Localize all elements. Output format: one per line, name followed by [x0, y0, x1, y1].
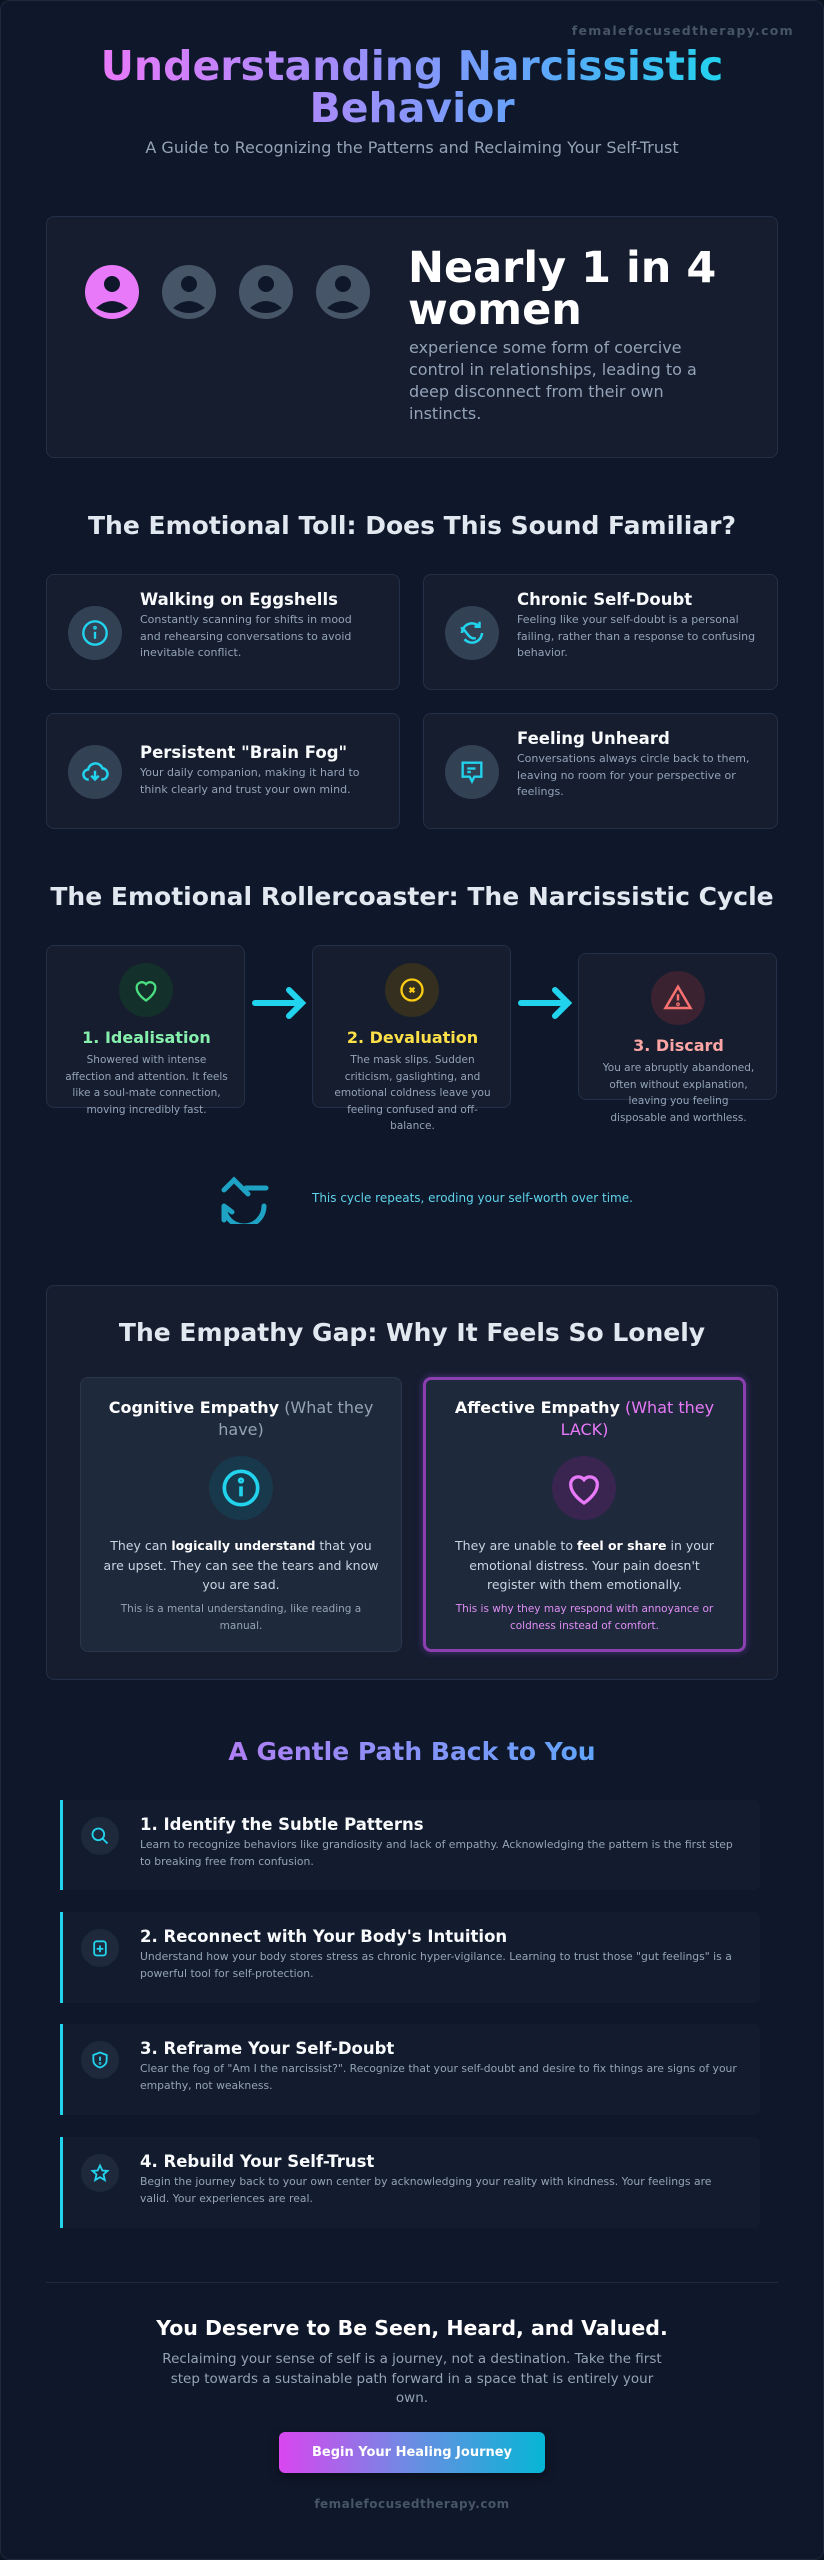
card: affective: Affective Empathy (What they LACK)	[455, 1398, 714, 1439]
card: affective: They are unable to feel or share in your emotional distress. Your pain doesn't register with them emotionally.	[455, 1538, 714, 1592]
card: idealisation: 1. Idealisation	[82, 1028, 211, 1047]
card: idealisation: Showered with intense affection and attention. It feels like a soul-mate connection, moving incredibly fast.	[65, 1054, 228, 1116]
card: discard: 3. Discard	[633, 1036, 724, 1055]
step 3: 3. Reframe Your Self-Doubt	[140, 2039, 394, 2058]
step 4: Begin the journey back to your own center by acknowledging your reality with kindness. Your feelings are valid. Your experiences are real.	[140, 2175, 711, 2204]
heading: gentle path: A Gentle Path Back to You	[228, 1737, 596, 1766]
cycle note: This cycle repeats, eroding your self-worth over time.	[312, 1191, 633, 1205]
panel: statistic	[46, 216, 778, 458]
step 2: 2. Reconnect with Your Body's Intuition	[140, 1927, 507, 1946]
heading: emotional toll: The Emotional Toll: Does This Sound Familiar?	[88, 511, 736, 540]
icon: people	[85, 265, 370, 319]
subtitle: A Guide to Recognizing the Patterns and Reclaiming Your Self-Trust	[145, 138, 679, 157]
card: self-doubt: Feeling like your self-doubt is a personal failing, rather than a response to confusing behavior.	[517, 613, 755, 659]
card: eggshells: Walking on Eggshells	[140, 590, 338, 609]
card: brain fog	[46, 713, 400, 829]
step 3: Clear the fog of "Am I the narcissist?". Recognize that your self-doubt and desire to fix things are signs of your empathy, not weakness.	[140, 2062, 737, 2092]
step 1: 1. Identify the Subtle Patterns	[140, 1815, 424, 1834]
stat heading: Nearly 1 in 4	[408, 243, 716, 293]
card: unheard: Conversations always circle back to them, leaving no room for your perspective or feelings.	[517, 752, 749, 798]
card: self-doubt	[423, 574, 778, 690]
card: idealisation	[46, 945, 245, 1108]
card: devaluation	[312, 945, 511, 1108]
footer: femalefocusedtherapy.com	[314, 2497, 510, 2511]
title: Behavior	[309, 84, 515, 132]
step 2: Understand how your body stores stress as chronic hyper-vigilance. Learning to trust those "gut feelings" is a powerful tool for self-protection.	[140, 1950, 732, 1980]
title: Understanding Narcissistic	[101, 42, 723, 90]
stat text: experience some form of coercive control in relationships, leading to a deep disconnect from their own instincts.	[409, 338, 697, 423]
card: devaluation: 2. Devaluation	[347, 1028, 478, 1047]
card: cognitive	[80, 1377, 402, 1652]
card: unheard: Feeling Unheard	[517, 729, 670, 748]
step 3	[60, 2024, 760, 2115]
closing text: Reclaiming your sense of self is a journey, not a destination. Take the first step towards a sustainable path forward in a space that is entirely your own.	[162, 2351, 662, 2406]
button: Begin Your Healing Journey	[312, 2445, 512, 2460]
card: unheard	[423, 713, 778, 829]
title	[101, 42, 723, 132]
arrow 1	[252, 987, 306, 1019]
card: brain fog: Persistent "Brain Fog"	[140, 743, 347, 762]
card: cognitive: They can logically understand that you are upset. They can see the tears and know you are sad.	[104, 1538, 378, 1592]
step 1	[60, 1800, 760, 1890]
step 1: Learn to recognize behaviors like grandiosity and lack of empathy. Acknowledging the pattern is the first step to breaking free from confusion.	[140, 1838, 733, 1868]
card: affective: This is why they may respond with annoyance or coldness instead of comfort.	[456, 1603, 713, 1632]
panel: empathy gap	[46, 1285, 778, 1680]
card: eggshells	[46, 574, 400, 690]
card: brain fog: Your daily companion, making it hard to think clearly and trust your own mind.	[140, 766, 360, 796]
stat heading: women	[408, 285, 582, 335]
step 4	[60, 2137, 760, 2228]
step 4: 4. Rebuild Your Self-Trust	[140, 2152, 374, 2171]
watermark: femalefocusedtherapy.com	[572, 23, 794, 38]
card: devaluation: The mask slips. Sudden criticism, gaslighting, and emotional coldness leave you feeling confused and off-balance.	[334, 1054, 491, 1132]
arrow 2	[518, 987, 572, 1019]
button	[279, 2432, 545, 2473]
card: discard: You are abruptly abandoned, often without explanation, leaving you feeling disposable and worthless.	[603, 1062, 754, 1124]
card: cognitive: This is a mental understanding, like reading a manual.	[121, 1603, 361, 1632]
card: self-doubt: Chronic Self-Doubt	[517, 590, 692, 609]
card: cognitive: Cognitive Empathy (What they have)	[109, 1398, 373, 1439]
heading: empathy gap: The Empathy Gap: Why It Feels So Lonely	[119, 1318, 705, 1347]
closing heading: You Deserve to Be Seen, Heard, and Valued.	[156, 2316, 668, 2340]
step 2	[60, 1912, 760, 2003]
card: discard	[578, 953, 777, 1100]
card: affective	[423, 1377, 746, 1652]
heading: rollercoaster: The Emotional Rollercoaster: The Narcissistic Cycle	[50, 882, 774, 911]
icon: repeat cycle	[222, 1176, 268, 1224]
card: eggshells: Constantly scanning for shifts in mood and rehearsing conversations to avoid inevitable conflict.	[140, 613, 352, 659]
stat heading	[408, 243, 716, 335]
